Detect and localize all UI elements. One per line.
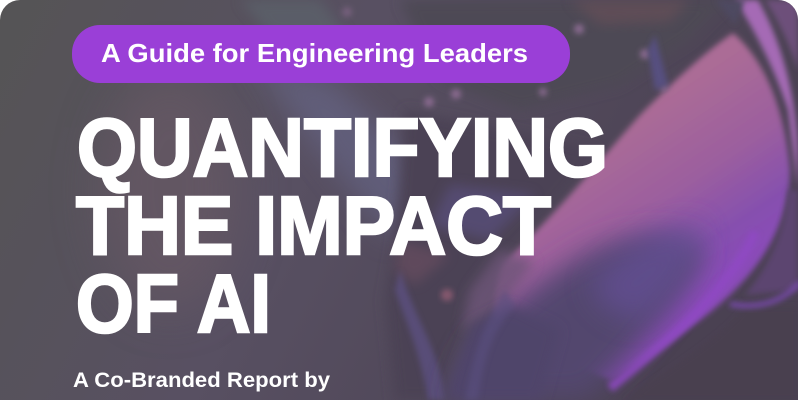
pill label: A Guide for Engineering Leaders xyxy=(101,38,528,68)
main title: QUANTIFYING xyxy=(77,101,608,194)
main title: OF AI xyxy=(76,257,271,350)
dark lower right xyxy=(625,307,798,400)
tag pill xyxy=(72,25,570,83)
glass body xyxy=(495,33,790,380)
subtitle: A Co-Branded Report by xyxy=(73,369,330,392)
right rim xyxy=(745,190,798,295)
main title xyxy=(76,117,604,334)
main title: THE IMPACT xyxy=(76,179,551,272)
bokeh dots xyxy=(342,7,668,107)
